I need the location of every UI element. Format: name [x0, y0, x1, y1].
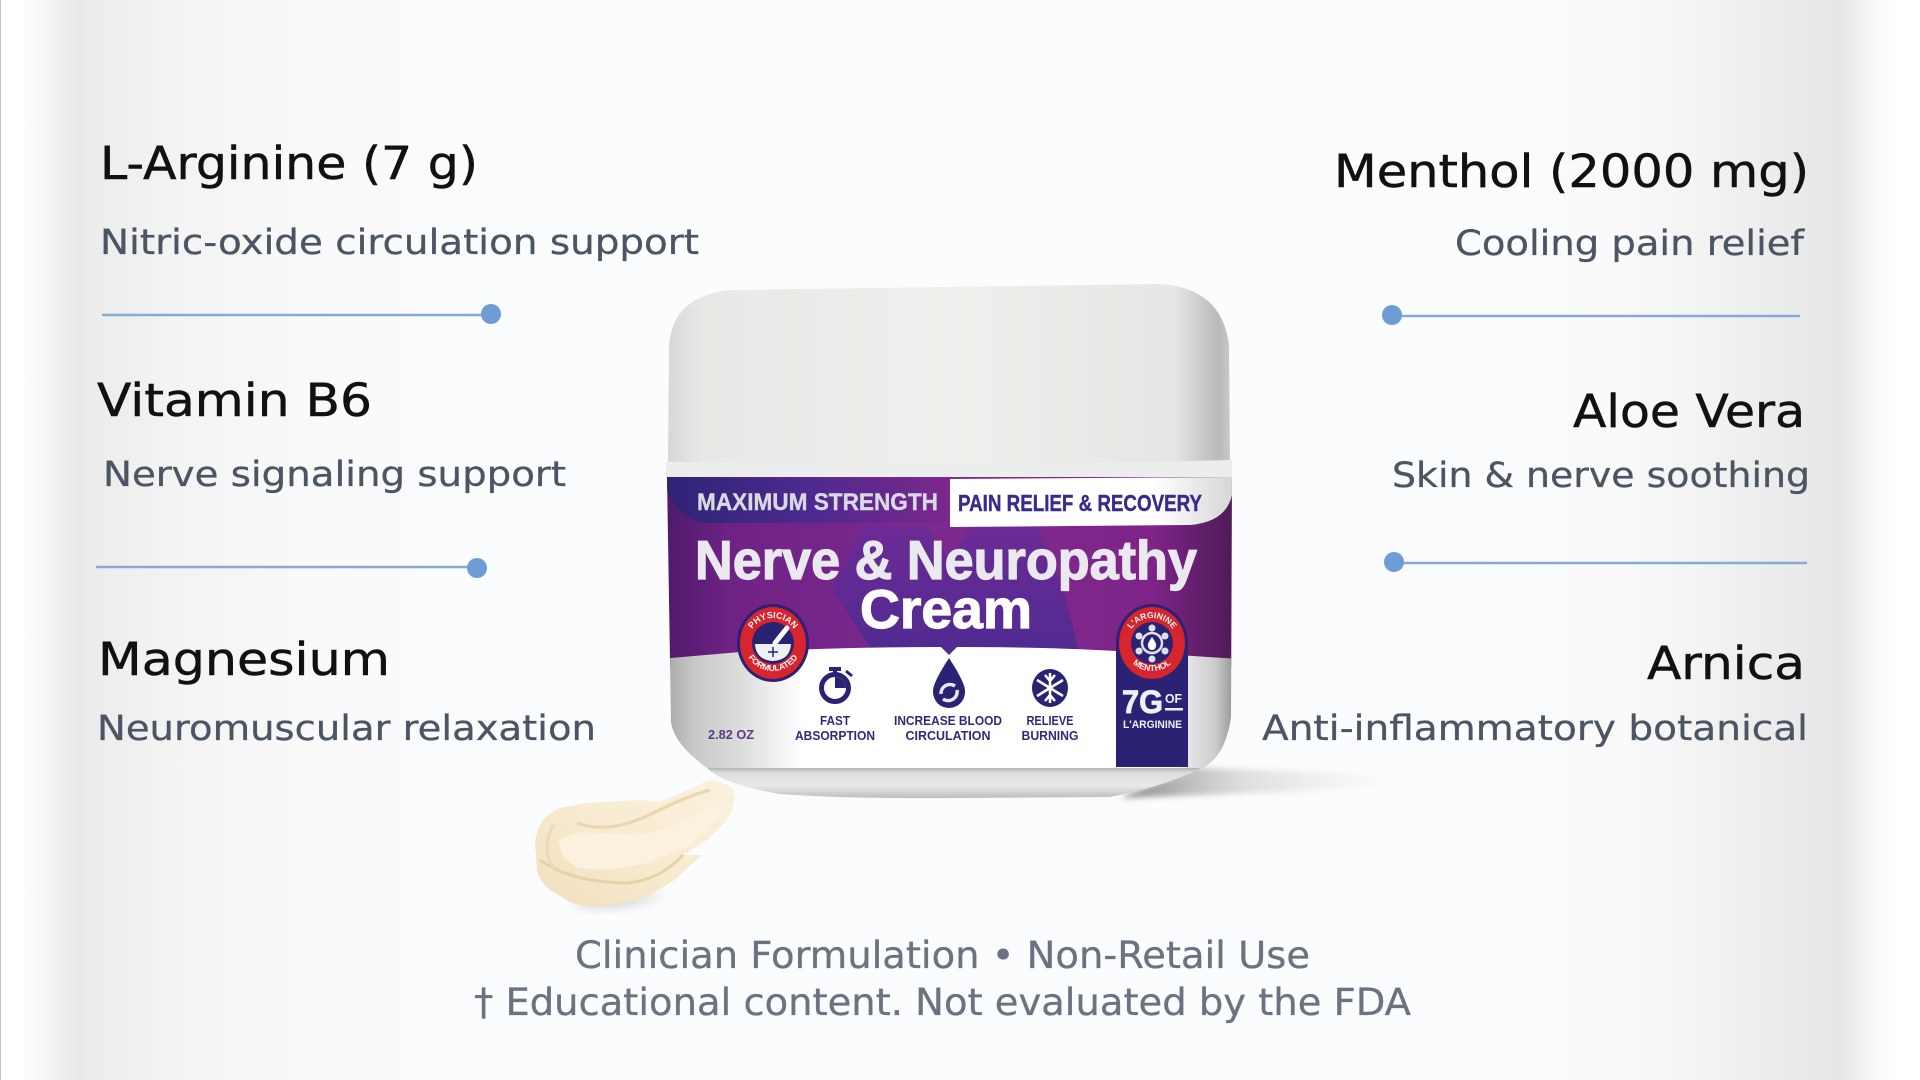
purple label panel [660, 477, 1240, 667]
text: increase blood circulation [894, 713, 1002, 743]
text: relieve burning: BURNING [1022, 728, 1078, 743]
heading: Vitamin B6 [97, 374, 372, 427]
text: increase blood circulation: INCREASE BLOOD [894, 713, 1002, 728]
jar base [707, 767, 1203, 798]
callout: Menthol [1334, 145, 1809, 325]
badge: l-arginine menthol: MENTHOL [1133, 659, 1172, 671]
label: product name: Nerve & Neuropathy [695, 529, 1197, 591]
label: 7g of l-arginine: L'ARGININE [1123, 719, 1182, 731]
icon: stopwatch [822, 667, 852, 702]
description: Skin & nerve soothing [1392, 456, 1810, 496]
jar label [660, 477, 1240, 772]
badge: physician formulated: PHYSICIAN [748, 612, 798, 629]
jar lid [668, 284, 1230, 466]
label: maximum strength: MAXIMUM STRENGTH [697, 489, 938, 516]
callout: L-Arginine [100, 137, 699, 324]
text: increase blood circulation: CIRCULATION [906, 728, 990, 743]
connector line [96, 558, 487, 578]
connector line [102, 304, 501, 324]
footer line 2: † Educational content. Not evaluated by the FDA [474, 981, 1411, 1024]
icon: snowflake [1032, 669, 1068, 707]
heading: Aloe Vera [1573, 385, 1805, 438]
cream swatch [535, 780, 735, 908]
callout: Vitamin B6 [96, 374, 566, 578]
jar rim [666, 460, 1232, 480]
label: 7g of l-arginine [1122, 684, 1183, 731]
heading: L-Arginine (7 g) [100, 137, 478, 190]
product jar [666, 284, 1340, 802]
text: fast absorption: FAST [820, 713, 850, 728]
white lower panel [660, 647, 1240, 772]
badge: l-arginine menthol [1116, 604, 1188, 679]
heading: Arnica [1647, 637, 1805, 690]
text: fast absorption [795, 713, 875, 743]
description: Anti-inflammatory botanical [1262, 709, 1808, 749]
connector line [1384, 552, 1807, 572]
top band right [950, 477, 1234, 527]
callout: Aloe Vera [1384, 385, 1810, 572]
callout: Magnesium [97, 633, 596, 749]
heading: Magnesium [98, 633, 390, 686]
description: Cooling pain relief [1455, 224, 1805, 264]
badge: physician formulated: FORMULATED [748, 654, 797, 672]
badge: physician formulated [737, 604, 809, 682]
footer note [474, 934, 1411, 1024]
footer line 1: Clinician Formulation • Non-Retail Use [575, 934, 1310, 977]
callout: Arnica [1262, 637, 1808, 749]
central darker panel [833, 527, 1080, 655]
label: cream: Cream [860, 578, 1032, 640]
label: net weight: 2.82 OZ [708, 727, 754, 742]
label: 7g of l-arginine: OF [1165, 691, 1182, 706]
badge: l-arginine menthol: L'ARGININE [1127, 612, 1177, 629]
description: Neuromuscular relaxation [97, 709, 596, 749]
label: pain relief: PAIN RELIEF & RECOVERY [958, 490, 1202, 516]
top band left [667, 477, 923, 523]
label: 7g of l-arginine: 7G [1122, 684, 1163, 720]
text: fast absorption: ABSORPTION [795, 728, 875, 743]
navy side panel [1116, 640, 1188, 767]
jar shadow [1120, 768, 1400, 798]
connector line [1382, 305, 1800, 325]
icon: blood drop [933, 658, 965, 708]
text: relieve burning [1022, 713, 1078, 743]
text: relieve burning: RELIEVE [1026, 713, 1074, 728]
heading: Menthol (2000 mg) [1334, 145, 1809, 198]
description: Nerve signaling support [103, 455, 566, 495]
description: Nitric-oxide circulation support [100, 223, 699, 263]
